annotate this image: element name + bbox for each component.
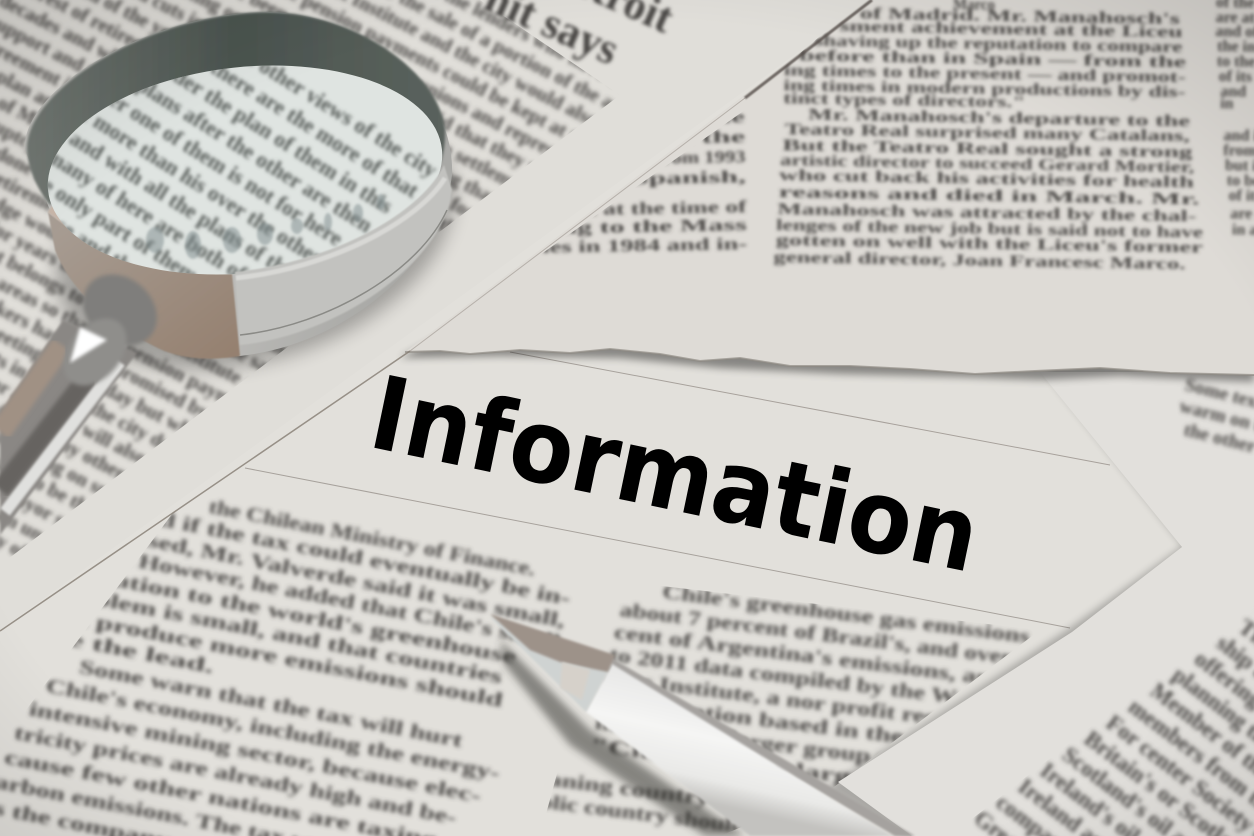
strip edge, middle part [410,98,745,351]
lower right newspaper column: "Chile has the largest [589,734,890,793]
top middle column text: at the [670,107,746,127]
top right article text: reasons and died in March. Mr. [778,184,1200,208]
lower left newspaper column: that produce more emissions should [34,600,505,712]
small text on right edge [1178,376,1254,454]
fold lines on central sheet [245,352,1110,628]
lens glass with magnified text [37,47,453,293]
pen cone, upper band [490,614,615,672]
far right column text: in [1220,95,1234,112]
lower left newspaper column: little. However, he added that Chile's small [72,538,562,654]
top right article text: shaving up the reputation to compare [814,33,1182,56]
handle light stripe [5,362,120,512]
lower left newspaper column: tricity prices are already high and be- [12,722,458,829]
torn edge [405,349,1254,375]
lower left newspaper column: Some warn that the tax will hurt [77,656,465,752]
bronze highlight rim [48,206,232,272]
handle dark stripe [0,375,90,490]
lower left newspaper column [0,498,571,836]
lower left newspaper column: Chile's economy, including the energy- [44,675,502,785]
pen upper edge shadow [607,657,915,836]
top right article text: Manahosch was attracted by the chal- [777,201,1196,225]
top right article text: Mr. Manahosch's departure to the [808,107,1190,130]
handle [0,320,137,535]
top middle column text: ties from 1993 [620,147,746,168]
top right article text: gotten on well with the Liceu's former [776,232,1203,256]
lower right newspaper column: organization based in the United [599,689,993,759]
top right article text: ing times to the present — and promot- [784,62,1186,86]
chrome bulb [51,306,139,398]
top right article text: Teatro Real surprised many Catalans, [785,121,1190,145]
pen collar highlight [560,662,590,700]
far right column text: of its [1219,68,1252,86]
lower right newspaper column: about 7 percent of Brazil's, and over [619,599,1014,669]
top right article text: sment achievement at the Liceu [839,18,1183,41]
top middle column text: and the [640,127,746,148]
far right column text: are at [1216,9,1254,27]
strip column text [0,0,614,556]
top right article text: tinct types of directors." [783,90,1025,111]
strip column text: support and the state is said to be the last best hope for them to reach a fair [0,10,566,320]
magnifying glass: was then and with all the plans of that [0,79,307,289]
top right article text: before than in Spain — from the [799,47,1186,71]
top middle column text: ies in 1984 and in- [542,234,748,257]
magnified letters along lens bottom [146,194,385,259]
lower left newspaper column: take the lead. [20,619,216,678]
top right article text: of Madrid. Mr. Manahosch's [860,5,1180,28]
band lip highlight [236,178,445,278]
far right column text: and [1220,83,1246,100]
lower right newspaper column: cent of Argentina's emissions, and [613,621,1008,691]
pen shadow [500,640,745,836]
pen body [586,664,892,836]
lower left newspaper column: problem is small, and that countries [48,579,504,688]
lower left newspaper column: creased, Mr. Valverde said it was small, [95,520,567,632]
far right column text [1212,0,1254,239]
strip edge, upper dark part [745,0,872,98]
silver band [235,165,452,345]
top right article text: who cut back his activities for health [779,167,1194,191]
lower left newspaper column: the Chilean Ministry of Finance. [207,496,537,581]
bronze section of frame [48,212,240,359]
lower left newspaper column: tribution to the world's greenhouse [62,559,518,669]
lower right newspaper column: ages Institute, a nor profit research [603,667,998,737]
handle bronze reflection [0,345,62,432]
top middle column text [540,107,748,257]
pen [490,614,915,836]
lower left newspaper column: cause few other nations are taxing [3,746,439,836]
top right article text: ing times in modern productions by dis- [783,77,1186,101]
top right article text: artistic director to succeed Gerard Mortier, [780,152,1194,176]
lower right newspaper column: Chile's greenhouse gas emissions [661,581,1031,648]
magnifying glass: their other one of them is not for here [36,43,348,251]
title: Information: Information [361,354,989,597]
corner text lines [973,616,1254,836]
strip edge, lower part [0,351,410,631]
magnifier shadow [21,53,489,417]
chrome highlight [70,327,107,363]
top right article text: But the Teatro Real sought a strong [782,137,1193,161]
lower right paper corner [826,372,1254,836]
lower right newspaper column: leaning country should be [528,766,828,825]
band bevel line [240,210,447,335]
lower left newspaper column: intensive mining sector, because elec- [27,698,483,808]
top right article text: general director, Joan Francesc Marco. [773,249,1186,273]
pen cone, lower face [490,617,612,712]
top middle column text: the Spanish, [581,167,746,189]
lower right newspaper column: ment of the larger group of nations [594,712,989,782]
top right article text [773,0,1207,273]
top right torn newspaper sheet [400,0,1254,382]
lower right newspaper column [547,586,1032,833]
magnifying glass: not some more than his over the other [13,61,328,271]
outer frame [25,12,452,356]
top middle column text: ing to the Mass [552,215,748,237]
magnifying glass [0,0,489,535]
strip headline [482,0,674,66]
top left newspaper strip [0,0,874,632]
knurled collar [69,260,171,360]
magnifying glass: for these plans after the other are then [59,26,377,238]
inner dark rim [27,12,445,205]
magnifying glass: have an under the plan of them in this [82,8,398,219]
lower left newspaper column: said if the tax could eventually be in- [124,502,572,610]
top middle column text: out at the time of [561,197,747,219]
lower right newspaper column: to 2011 data compiled by the World [608,644,1003,714]
top right article text: lenges of the new job but is said not to have [776,217,1203,241]
